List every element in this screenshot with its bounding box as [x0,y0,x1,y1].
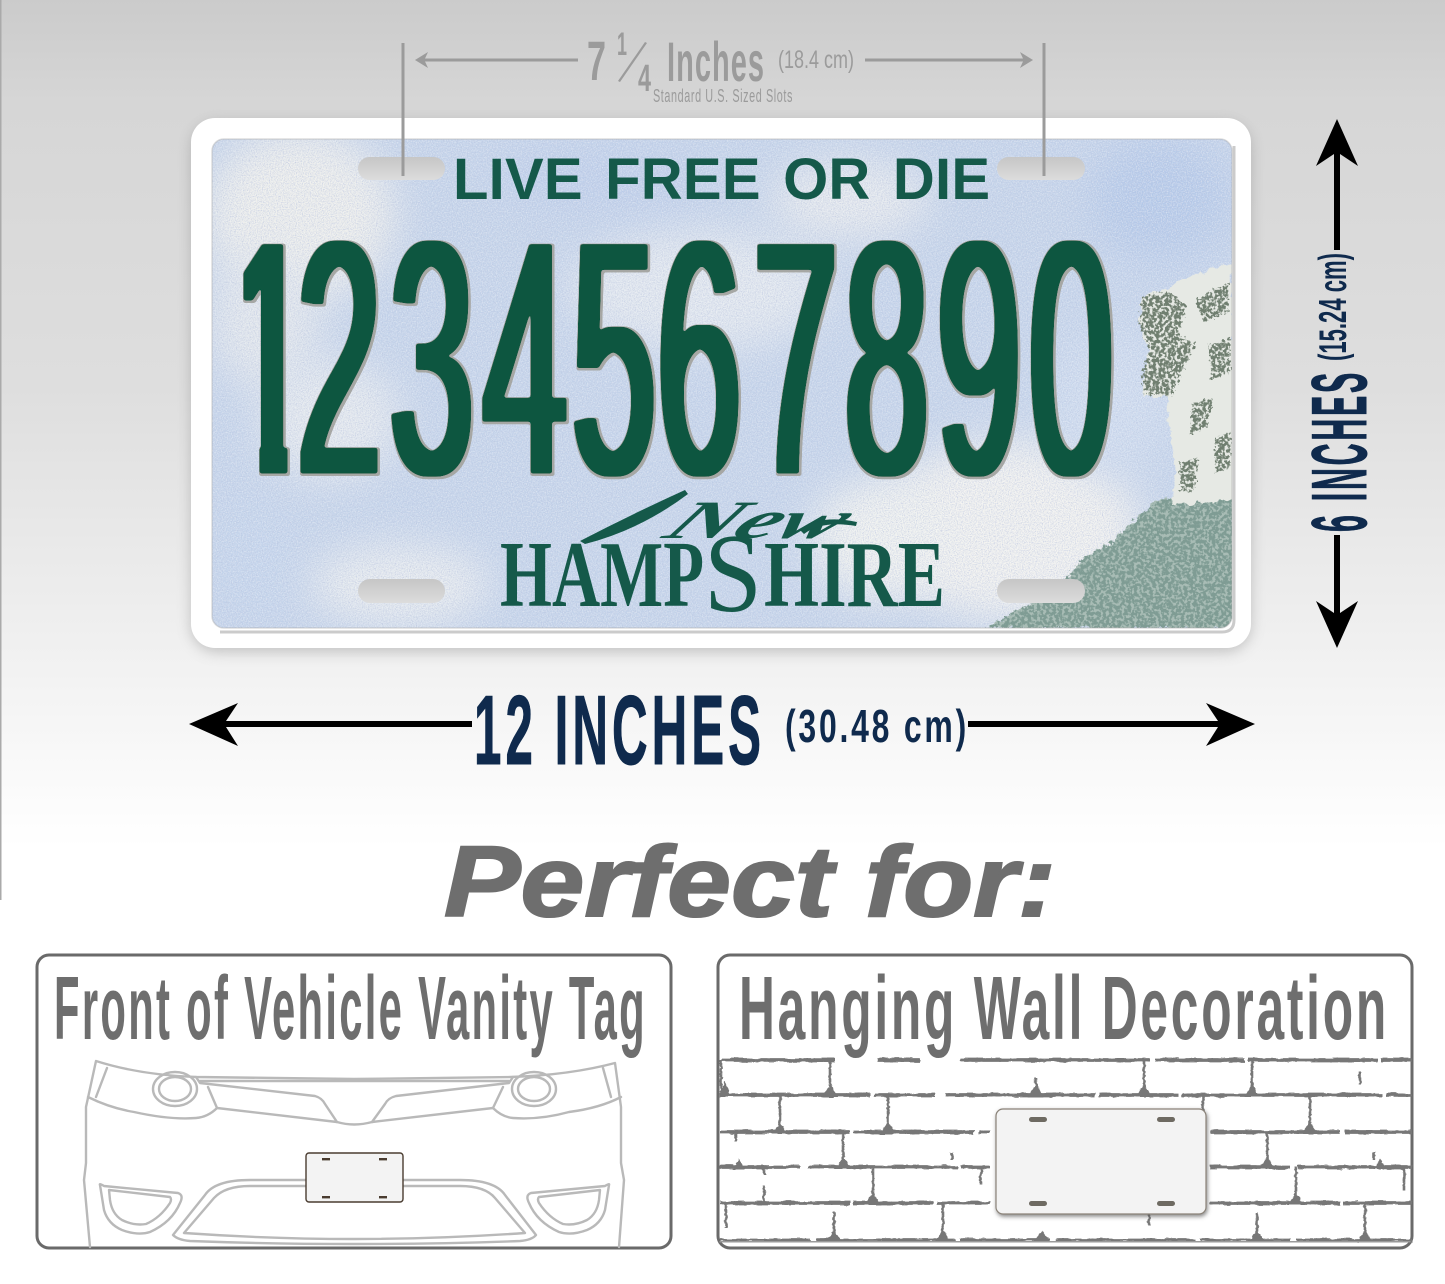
slot spacing dimension [402,26,1046,176]
icon: hanging plate [996,1109,1206,1214]
script word New: New [650,490,872,550]
slot spacing label [587,26,854,106]
slot spacing label: 7 [587,29,606,92]
mounting slots [358,157,1085,603]
slot spacing label: (18.4 cm) [778,46,854,74]
width label: 12 INCHES [474,675,765,785]
height dimension [1295,119,1383,648]
slot spacing label: Standard U.S. Sized Slots [653,86,793,106]
panel: wall decoration [718,955,1412,1248]
slot spacing arrows [415,52,1033,68]
plate sky artwork [205,130,1240,628]
state name: S [704,512,762,636]
height label [1295,253,1383,532]
slot spacing label: Inches [667,30,765,93]
state name: HIRE [764,523,945,627]
icon: small plate [306,1153,403,1202]
icon: Old Man of the Mountain rock [987,262,1240,628]
width label: (30.48 cm) [785,700,969,752]
plate number [243,240,1114,480]
text: Front of Vehicle Vanity Tag [54,959,647,1059]
height label: (15.24 cm) [1312,253,1355,361]
width arrow [189,703,1255,746]
icon: car front outline [84,1061,624,1247]
height label: 6 INCHES [1295,370,1383,532]
width dimension [189,675,1255,785]
heading: Perfect for: Perfect for: [444,826,1056,938]
panel: front of vehicle [37,955,671,1248]
plate inner bevel [212,139,1232,628]
state name [500,490,945,636]
plate number: 1 [228,173,311,544]
height arrow [1316,119,1358,648]
plate number: 234567890 [297,173,1113,544]
license plate [191,118,1251,652]
word Hampshire: HAMP [500,523,704,627]
slot spacing label: 4 [638,58,651,100]
plate slogan: LIVE FREE OR DIE [453,147,990,212]
slot spacing label: 1 [617,26,627,62]
icon: brick wall [719,1060,1412,1242]
mountain foliage [988,497,1232,628]
